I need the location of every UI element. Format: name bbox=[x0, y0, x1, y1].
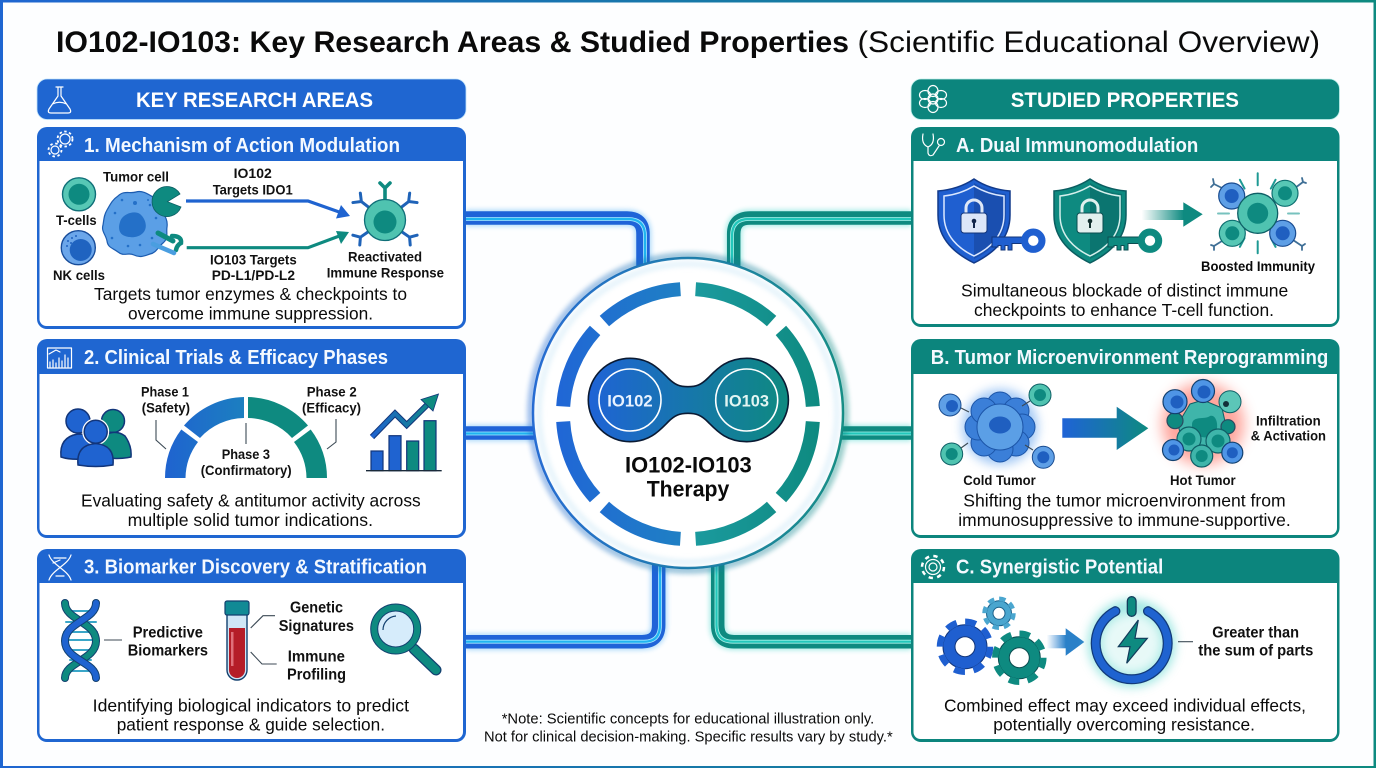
caption: Targets tumor enzymes & checkpoints to bbox=[94, 284, 407, 304]
caption: patient response & guide selection. bbox=[117, 715, 385, 735]
icon: reactivated immune cell bbox=[353, 183, 417, 245]
labels: Tumor cell bbox=[103, 168, 169, 184]
icon: magnifier bbox=[374, 608, 436, 670]
icon: teal shield with lock bbox=[1054, 179, 1126, 263]
labels: T-cells bbox=[56, 212, 97, 228]
arrow: IO103 to immune cell bbox=[187, 231, 349, 248]
icon: dna helix bbox=[64, 603, 97, 678]
hub label: IO102-IO103 bbox=[625, 452, 752, 477]
label: Boosted Immunity bbox=[1201, 259, 1315, 274]
labels: Reactivated bbox=[348, 249, 422, 265]
labels: Immune Response bbox=[327, 265, 444, 281]
icon: patients group bbox=[61, 409, 131, 466]
hub label: Therapy bbox=[647, 477, 730, 502]
arrow: IO102 to immune cell bbox=[186, 201, 350, 218]
panel B: tumor microenvironment bbox=[911, 339, 1340, 538]
heading: B. Tumor Microenvironment Reprogramming bbox=[931, 346, 1328, 369]
footnote: Not for clinical decision-making. Specific results vary by study.* bbox=[484, 729, 893, 746]
phase labels: (Confirmatory) bbox=[201, 462, 292, 478]
icon: blue shield with lock bbox=[938, 179, 1010, 263]
panel 3: biomarker discovery bbox=[37, 549, 466, 742]
labels: Profiling bbox=[287, 666, 346, 683]
gauge: trial phases bbox=[165, 397, 327, 478]
heading: C. Synergistic Potential bbox=[956, 556, 1163, 579]
labels: Hot Tumor bbox=[1170, 472, 1236, 488]
molecule: IO102 linked to IO103: IO102 bbox=[607, 392, 653, 410]
caption: multiple solid tumor indications. bbox=[128, 510, 373, 530]
labels: Signatures bbox=[279, 618, 354, 635]
title bbox=[56, 26, 1320, 59]
section header: key research areas: KEY RESEARCH AREAS bbox=[136, 89, 373, 112]
arrow: to boosted immunity bbox=[1142, 202, 1203, 227]
caption: Shifting the tumor microenvironment from bbox=[963, 491, 1286, 511]
icon: dna header bbox=[49, 555, 71, 580]
icon: nk cell bbox=[61, 231, 95, 265]
title: (Scientific Educational Overview) bbox=[858, 26, 1320, 59]
labels: IO102 bbox=[234, 165, 272, 181]
section header: studied properties: STUDIED PROPERTIES bbox=[1011, 89, 1239, 112]
caption: Evaluating safety & antitumor activity across bbox=[81, 491, 421, 511]
caption bbox=[958, 491, 1291, 530]
heading: A. Dual Immunomodulation bbox=[956, 134, 1198, 157]
labels bbox=[963, 413, 1326, 488]
caption: immunosuppressive to immune-supportive. bbox=[958, 510, 1291, 530]
caption bbox=[94, 284, 407, 323]
molecule: IO102 linked to IO103 bbox=[588, 358, 788, 442]
icon: t-cell bbox=[62, 178, 96, 211]
labels: Immune bbox=[288, 649, 345, 666]
labels: Biomarkers bbox=[128, 643, 208, 660]
caption bbox=[93, 696, 409, 735]
connectors: blue links from hub to left panels bbox=[466, 218, 660, 642]
hub label bbox=[625, 452, 752, 502]
heading: 2. Clinical Trials & Efficacy Phases bbox=[84, 346, 388, 369]
label: Greater than bbox=[1212, 625, 1299, 642]
labels: Predictive bbox=[133, 625, 203, 642]
panel C: synergistic potential bbox=[911, 549, 1340, 742]
icon: IO103 checkpoint binder bbox=[153, 233, 181, 253]
labels: & Activation bbox=[1251, 427, 1326, 443]
phase leader lines bbox=[156, 419, 336, 449]
caption: Combined effect may exceed individual effects, bbox=[944, 696, 1306, 716]
labels: Infiltration bbox=[1256, 413, 1321, 429]
panel A: dual immunomodulation bbox=[911, 127, 1340, 327]
caption: overcome immune suppression. bbox=[128, 303, 373, 323]
label bbox=[1198, 625, 1313, 660]
caption bbox=[944, 696, 1306, 735]
phase labels: Phase 2 bbox=[307, 384, 357, 400]
label: the sum of parts bbox=[1198, 643, 1313, 660]
icon: trial chart bbox=[48, 348, 72, 368]
phase labels: (Safety) bbox=[142, 400, 190, 416]
icon: teal key bbox=[1108, 232, 1159, 250]
icon: cold tumor bbox=[939, 384, 1054, 468]
icon: blue key bbox=[992, 232, 1042, 250]
icon: flask bbox=[48, 87, 71, 113]
labels bbox=[53, 165, 444, 283]
icon: stethoscope bbox=[923, 134, 944, 156]
leader line bbox=[1178, 641, 1193, 643]
phase labels: Phase 1 bbox=[141, 384, 189, 400]
icon: gears bbox=[940, 599, 1043, 682]
heading: 1. Mechanism of Action Modulation bbox=[84, 134, 400, 157]
icon: power button with bolt bbox=[1088, 599, 1176, 687]
footnote: *Note: Scientific concepts for educational illustration only. bbox=[502, 710, 874, 727]
icon: hot tumor bbox=[1162, 380, 1244, 467]
icon: atom flower bbox=[920, 86, 946, 112]
icon: tumor cell bbox=[103, 191, 167, 257]
ring segments bbox=[563, 289, 813, 539]
labels: Genetic bbox=[290, 600, 343, 617]
leader lines bbox=[104, 616, 277, 664]
title: IO102-IO103: Key Research Areas & Studied Properties bbox=[56, 26, 849, 59]
caption: Identifying biological indicators to predict bbox=[93, 696, 409, 716]
caption: potentially overcoming resistance. bbox=[993, 715, 1255, 735]
icon: rising bar chart bbox=[366, 394, 442, 471]
central hub bbox=[531, 256, 845, 570]
arrow: gears to power bbox=[1047, 628, 1084, 656]
icon: boosted immune cells bbox=[1211, 173, 1306, 253]
labels: PD-L1/PD-L2 bbox=[212, 267, 295, 283]
panel 2: clinical trials bbox=[37, 339, 466, 538]
labels: Cold Tumor bbox=[963, 472, 1036, 488]
phase labels: (Efficacy) bbox=[302, 400, 361, 416]
footnote bbox=[484, 710, 893, 746]
caption bbox=[961, 281, 1288, 320]
phase labels bbox=[141, 384, 361, 478]
caption bbox=[81, 491, 421, 530]
molecule: IO102 linked to IO103: IO103 bbox=[724, 392, 769, 410]
connectors: teal links from hub to right panels bbox=[716, 218, 911, 642]
heading: 3. Biomarker Discovery & Stratification bbox=[84, 556, 427, 579]
icon: gears bbox=[48, 132, 72, 156]
arrow: cold to hot bbox=[1062, 407, 1148, 450]
caption: Simultaneous blockade of distinct immune bbox=[961, 281, 1288, 301]
section header: key research areas bbox=[37, 79, 466, 120]
panel 1: mechanism of action bbox=[37, 127, 466, 329]
icon: gear outline bbox=[922, 556, 944, 578]
phase labels: Phase 3 bbox=[222, 446, 270, 462]
caption: checkpoints to enhance T-cell function. bbox=[974, 300, 1274, 320]
icon: blood tube bbox=[225, 601, 249, 680]
icon: IO102 enzyme binder bbox=[152, 187, 181, 217]
labels: Targets IDO1 bbox=[213, 181, 293, 197]
labels: NK cells bbox=[53, 267, 105, 283]
labels bbox=[128, 600, 354, 683]
labels: IO103 Targets bbox=[210, 251, 297, 267]
section header: studied properties bbox=[911, 79, 1340, 120]
